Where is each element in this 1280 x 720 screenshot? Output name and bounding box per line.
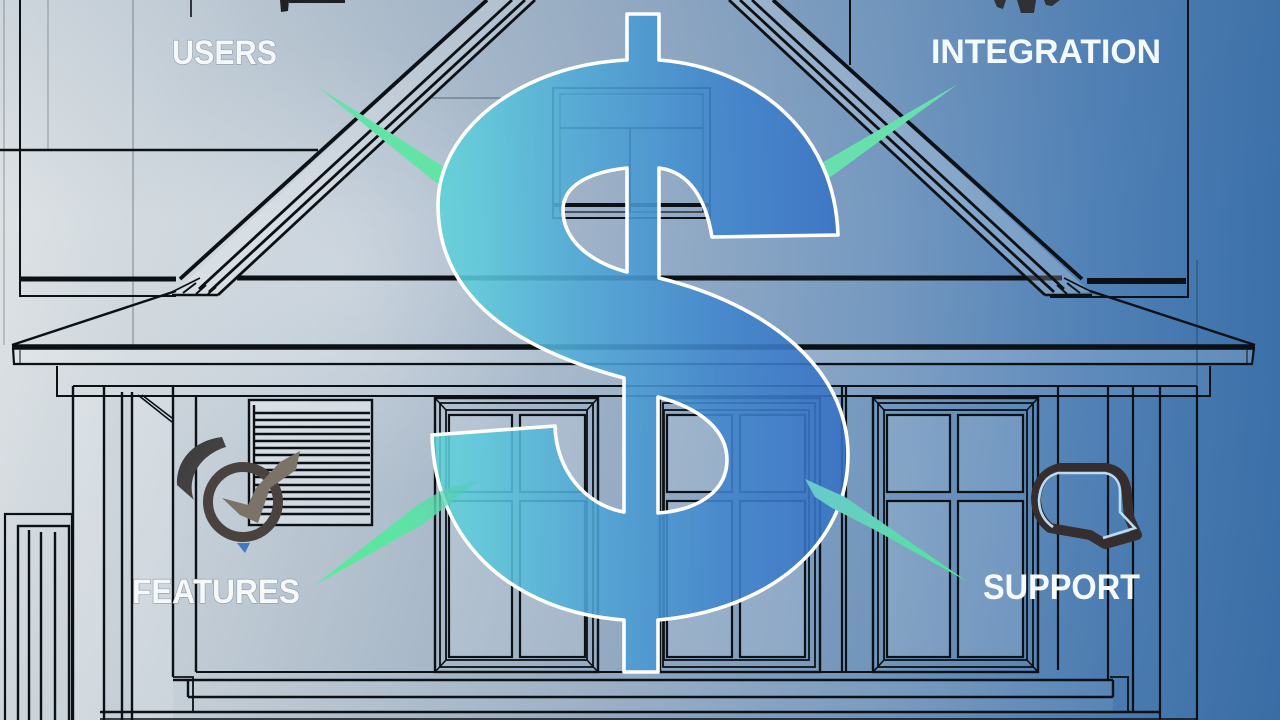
connector: features spike (315, 480, 480, 585)
label: integration: INTEGRATION (931, 33, 1161, 71)
icon: integration gear (cropped at top) (994, 0, 1060, 13)
icon: users (cropped at top) (280, 0, 345, 12)
base steps (100, 672, 1197, 719)
window 3 (873, 398, 1038, 672)
label: features: FEATURES (132, 573, 300, 611)
label: users: USERS (172, 34, 277, 72)
connector: users spike (318, 87, 452, 190)
window 2 (660, 398, 820, 672)
icon: support speech bubble (1036, 468, 1137, 544)
louvred vent (249, 400, 372, 525)
door (5, 514, 72, 720)
gable roof rafters (172, 0, 1092, 295)
label: support: SUPPORT (983, 568, 1140, 607)
gable window (553, 88, 710, 218)
upper facade lines (0, 0, 1197, 396)
dollar sign (432, 14, 848, 672)
porch beam (57, 366, 1210, 396)
eaves (12, 291, 1255, 364)
connector: support spike (805, 479, 968, 582)
icon: features gear and tool (177, 437, 300, 553)
walls and columns (73, 386, 1197, 720)
light wall panels (12, 350, 1252, 720)
connector: integration spike (820, 84, 958, 178)
window 1 (435, 398, 598, 672)
